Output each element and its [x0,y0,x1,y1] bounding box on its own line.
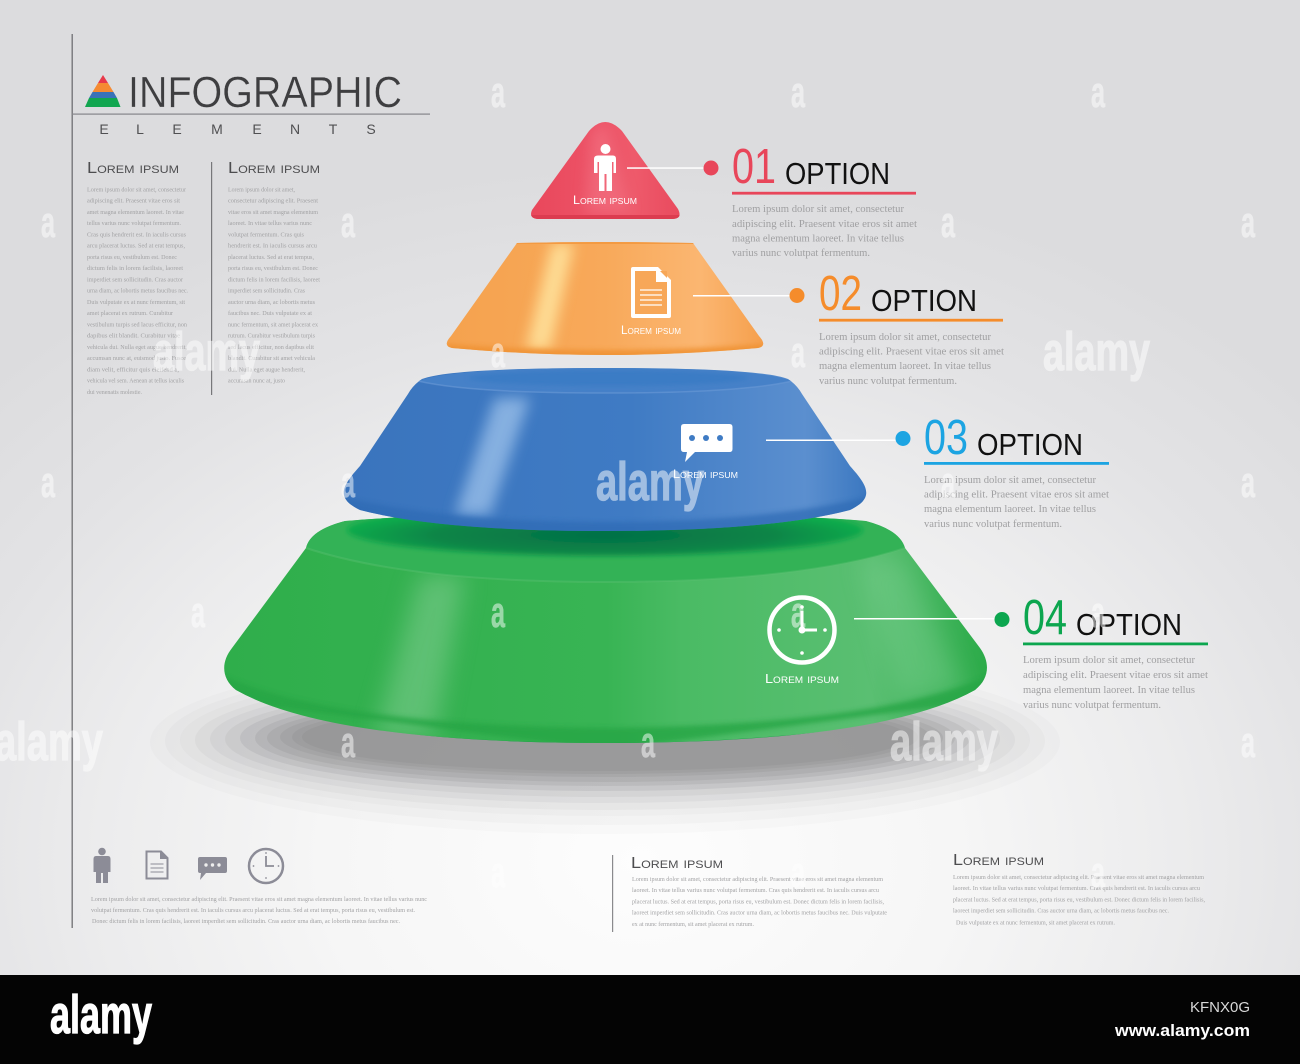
column 2 body: dictum felis in lorem facilisis, laoreet [228,276,320,284]
option 03 [766,411,1109,530]
stock watermarks: a [41,198,55,247]
icon: person grey [94,848,110,883]
subtitle: M [211,121,223,137]
bottom middle text [632,876,887,928]
pyramid ground shadow [150,650,1060,834]
connector 03 [766,440,896,441]
column 2 body: porta risus eu, vestibulum est. Donec [228,265,318,272]
body 04 [1023,655,1208,711]
stock watermarks [0,68,1255,897]
number 04: 04 [1023,591,1067,645]
stock watermarks: a [491,588,505,637]
column 1 body: porta risus eu, vestibulum est. Donec [87,254,177,261]
column 2 body: blandit. Curabitur sit amet vehicula [228,355,315,362]
stock watermarks: a [1091,68,1105,117]
bottom middle text: placerat luctus. Sed at erat tempus, porta risus eu, vestibulum est. Donec dictum felis in lorem facilisis, [632,898,884,906]
stock watermarks: a [941,458,955,507]
pyramid tier 1: red [525,122,685,221]
bottom right text: placerat luctus. Sed at erat tempus, porta risus eu, vestibulum est. Donec dictum felis in lorem facilisis, [953,896,1205,904]
bottom right heading: Lorem ipsum [953,852,1044,869]
bottom middle text: Lorem ipsum dolor sit amet, consectetur adipiscing elit. Praesent vitae eros sit amet magna elementum [632,876,883,883]
column 2 body: placerat luctus. Sed at erat tempus, [228,254,314,261]
label: green tier: Lorem ipsum [765,671,839,686]
subtitle: E [172,121,182,137]
body 01 [732,204,917,259]
stock watermarks: alamy [596,452,704,512]
body 03: varius nunc volutpat fermentum. [924,519,1062,530]
bottom right text [953,874,1205,926]
body 03: Lorem ipsum dolor sit amet, consectetur [924,475,1096,486]
red shading [531,130,680,219]
icon: pyramid logo [85,75,120,107]
stock watermarks: a [791,328,805,377]
body 02 [819,332,1004,387]
column 2 body: hendrerit est. In iaculis cursus arcu [228,243,317,250]
bottom left icon row [94,848,283,883]
blue body [344,368,866,531]
title rule [72,114,430,115]
body 01: varius nunc volutpat fermentum. [732,248,870,259]
red body [531,122,680,219]
body 03: magna elementum laoreet. In vitae tellus [924,504,1096,515]
body 02: adipiscing elit. Praesent vitae eros sit amet [819,346,1004,358]
icon: clock grey [249,849,283,883]
green body [224,514,987,743]
column 2 heading: Lorem ipsum [228,160,320,177]
icon: clock on green tier [770,598,834,662]
subtitle: T [329,121,338,137]
footer url: www.alamy.com [1114,1021,1250,1040]
column 2 body: consectetur adipiscing elit. Praesent [228,198,318,205]
body 02: varius nunc volutpat fermentum. [819,376,957,387]
label: blue tier: Lorem ipsum [673,469,738,481]
icon: person on red tier [594,144,616,191]
body 03: adipiscing elit. Praesent vitae eros sit amet [924,490,1109,500]
connector 02 [693,295,790,296]
column 2 body: volutpat fermentum. Cras quis [228,232,305,238]
stock watermarks: a [341,718,355,767]
green shading [222,504,990,750]
column 2 body: vitae eros sit amet magna elementum [228,209,318,216]
column 1 body: vehicula vel sem. Aenean at tellus iaculis [87,378,185,385]
column divider [211,162,212,395]
stock watermarks: a [791,848,805,897]
underline 03 [924,462,1109,465]
column 1 body: imperdiet sem sollicitudin. Cras auctor [87,276,183,284]
column 1 heading: Lorem ipsum [87,160,179,177]
column 1 body: arcu placerat luctus. Sed at erat tempus, [87,243,185,250]
stock watermarks: a [1091,588,1105,637]
bottom right text: laoreet imperdiet sem sollicitudin. Cras auctor urna diam, ac lobortis metus faucibus nec. [953,908,1169,914]
number 02: 02 [819,267,862,321]
stock watermarks: a [491,68,505,117]
stock watermarks: alamy [890,712,998,772]
column 1 body: Cras quis hendrerit est. In iaculis cursus [87,232,187,238]
stock watermarks: a [1241,198,1255,247]
column 1 body: dictum felis in lorem facilisis, laoreet [87,265,183,272]
label: orange tier: Lorem ipsum [621,325,681,337]
column 2 body: laoreet. In vitae tellus varius nunc [228,220,312,227]
bottom right text: Lorem ipsum dolor sit amet, consectetur adipiscing elit. Praesent vitae eros sit amet magna elementum [953,874,1204,881]
bottom middle text: laoreet imperdiet sem sollicitudin. Cras auctor urna diam, ac lobortis metus faucibus nec. Duis vulputate [632,910,887,916]
body 01: magna elementum laoreet. In vitae tellus [732,234,904,244]
bottom middle text: laoreet. In vitae tellus varius nunc volutpat fermentum. Cras quis hendrerit est. In iaculis cursus arcu [632,887,879,894]
stock watermarks: a [341,198,355,247]
icon: chat grey [198,857,227,880]
column 1 body [87,186,188,396]
subtitle: L [136,121,144,137]
column 2 body: accumsan nunc at, justo [228,378,285,385]
icon: speech bubble on blue tier [681,424,732,462]
heading 01: OPTION [785,156,890,191]
stock watermarks: alamy [1043,322,1150,382]
number 03: 03 [924,411,968,465]
dot 03 [896,431,910,446]
column 1 body: amet placerat ex rutrum. Curabitur [87,310,173,317]
subtitle: E [252,121,262,137]
bottom left text [91,896,427,925]
connector 01 [627,167,704,169]
heading 04: OPTION [1076,607,1182,642]
column 1 body: Duis vulputate ex at nunc fermentum, sit [87,299,185,306]
icon: document on orange tier [631,267,671,318]
dot 01 [704,160,718,176]
column 1 body: vehicula dui. Nulla eget augue hendrerit, [87,344,187,351]
column 2 body: Lorem ipsum dolor sit amet, [228,186,295,194]
bottom middle heading: Lorem ipsum [631,855,723,872]
text column 2 [228,160,320,385]
blue shading [335,368,875,540]
subtitle [99,121,376,137]
stock watermarks: a [341,458,355,507]
dot 04 [994,612,1010,627]
body 04: varius nunc volutpat fermentum. [1023,700,1161,711]
number 01: 01 [732,140,776,194]
body 04: adipiscing elit. Praesent vitae eros sit amet [1023,670,1208,681]
subtitle: S [366,121,376,137]
body 03 [924,475,1109,530]
body 04: Lorem ipsum dolor sit amet, consectetur [1023,655,1195,666]
pyramid tier 4: green [222,504,990,750]
option 04 [854,591,1208,711]
body 04: magna elementum laoreet. In vitae tellus [1023,685,1195,696]
column 2 body: nunc fermentum, sit amet placerat ex [228,322,319,328]
bottom right text: Duis vulputate ex at nunc fermentum, sit amet placerat ex rutrum. [956,920,1115,926]
column 1 body: adipiscing elit. Praesent vitae eros sit [87,198,180,205]
column 2 body: imperdiet sem sollicitudin. Cras [228,288,306,295]
stock watermarks: a [791,68,805,117]
text column 1 [87,160,188,396]
label: red tier: Lorem ipsum [573,195,637,207]
column 1 body: vestibulum turpis sed lacus efficitur, non [87,322,187,328]
stock watermarks: a [491,848,505,897]
stock watermarks: a [41,458,55,507]
column 2 body: dui. Nulla eget augue hendrerit, [228,366,305,374]
bottom right text: laoreet. In vitae tellus varius nunc volutpat fermentum. Cras quis hendrerit est. In iaculis cursus arcu [953,885,1200,892]
column 2 body: rutrum. Curabitur vestibulum turpis [228,333,316,340]
subtitle: E [99,121,109,137]
column 1 body: amet magna elementum laoreet. In vitae [87,209,184,216]
underline 04 [1023,642,1208,645]
column 1 body: Lorem ipsum dolor sit amet, consectetur [87,186,186,194]
underline 01 [732,192,916,195]
heading 03: OPTION [977,427,1083,462]
stock watermarks: a [641,718,655,767]
footer bar [0,975,1300,1064]
option 02 [693,267,1004,387]
body 02: magna elementum laoreet. In vitae tellus [819,361,991,372]
bottom left text: Lorem ipsum dolor sit amet, consectetur adipiscing elit. Praesent vitae eros sit amet magna elementum laoreet. In vitae tellus varius nunc [91,896,427,903]
stock watermarks: a [791,588,805,637]
column 1 body: dui venenatis molestie. [87,389,142,396]
stock watermarks: a [491,328,505,377]
orange body [447,242,763,355]
column 1 body: tellus varius nunc volutpat fermentum. [87,220,181,227]
bottom right block [953,852,1205,926]
column 2 body: sed lacus efficitur, non dapibus elit [228,344,314,351]
option 01 [627,140,917,259]
column 2 body: auctor urna diam, ac lobortis metus [228,299,316,306]
pyramid tier 3: blue [335,368,875,540]
stock watermarks: a [1241,458,1255,507]
column 1 body: dapibus elit blandit. Curabitur vitae [87,333,180,340]
body 01: Lorem ipsum dolor sit amet, consectetur [732,204,904,215]
column 1 body: accumsan nunc at, euismod justo. Fusce [87,355,186,362]
body 02: Lorem ipsum dolor sit amet, consectetur [819,332,991,343]
stock watermarks: a [941,198,955,247]
body 01: adipiscing elit. Praesent vitae eros sit amet [732,219,917,230]
footer image id: KFNX0G [1190,999,1250,1016]
bottom divider [612,855,613,932]
connector 04 [854,618,995,620]
footer logo: alamy [50,985,152,1045]
bottom middle block [631,855,887,928]
icon: document grey [146,852,168,878]
frame line [72,34,73,928]
dot 02 [790,288,804,303]
stock watermarks: a [1091,848,1105,897]
bottom middle text: ex at nunc fermentum, sit amet placerat ex rutrum. [632,921,754,928]
bottom left text: Donec dictum felis in lorem facilisis, laoreet imperdiet sem sollicitudin. Cras auctor urna diam, ac lobortis metus faucibus nec. [92,918,400,925]
orange shading [446,241,764,360]
subtitle: N [290,121,300,137]
underline 02 [819,319,1003,322]
stock watermarks: a [191,588,205,637]
stock watermarks: a [1241,718,1255,767]
heading 02: OPTION [871,283,977,318]
pyramid tier 2: orange [446,241,764,360]
column 1 body: diam velit, efficitur quis eleifend a, [87,366,179,374]
column 2 body: faucibus nec. Duis vulputate ex at [228,310,312,317]
title text: INFOGRAPHIC [128,68,402,117]
column 1 body: urna diam, ac lobortis metus faucibus nec. [87,288,188,295]
column 2 body [228,186,320,385]
title block [72,68,430,137]
stock watermarks: alamy [153,322,260,382]
bottom left text: volutpat fermentum. Cras quis hendrerit est. In iaculis cursus arcu placerat luctus. Sed at erat tempus, porta risus eu, vestibulum est. [91,907,415,914]
